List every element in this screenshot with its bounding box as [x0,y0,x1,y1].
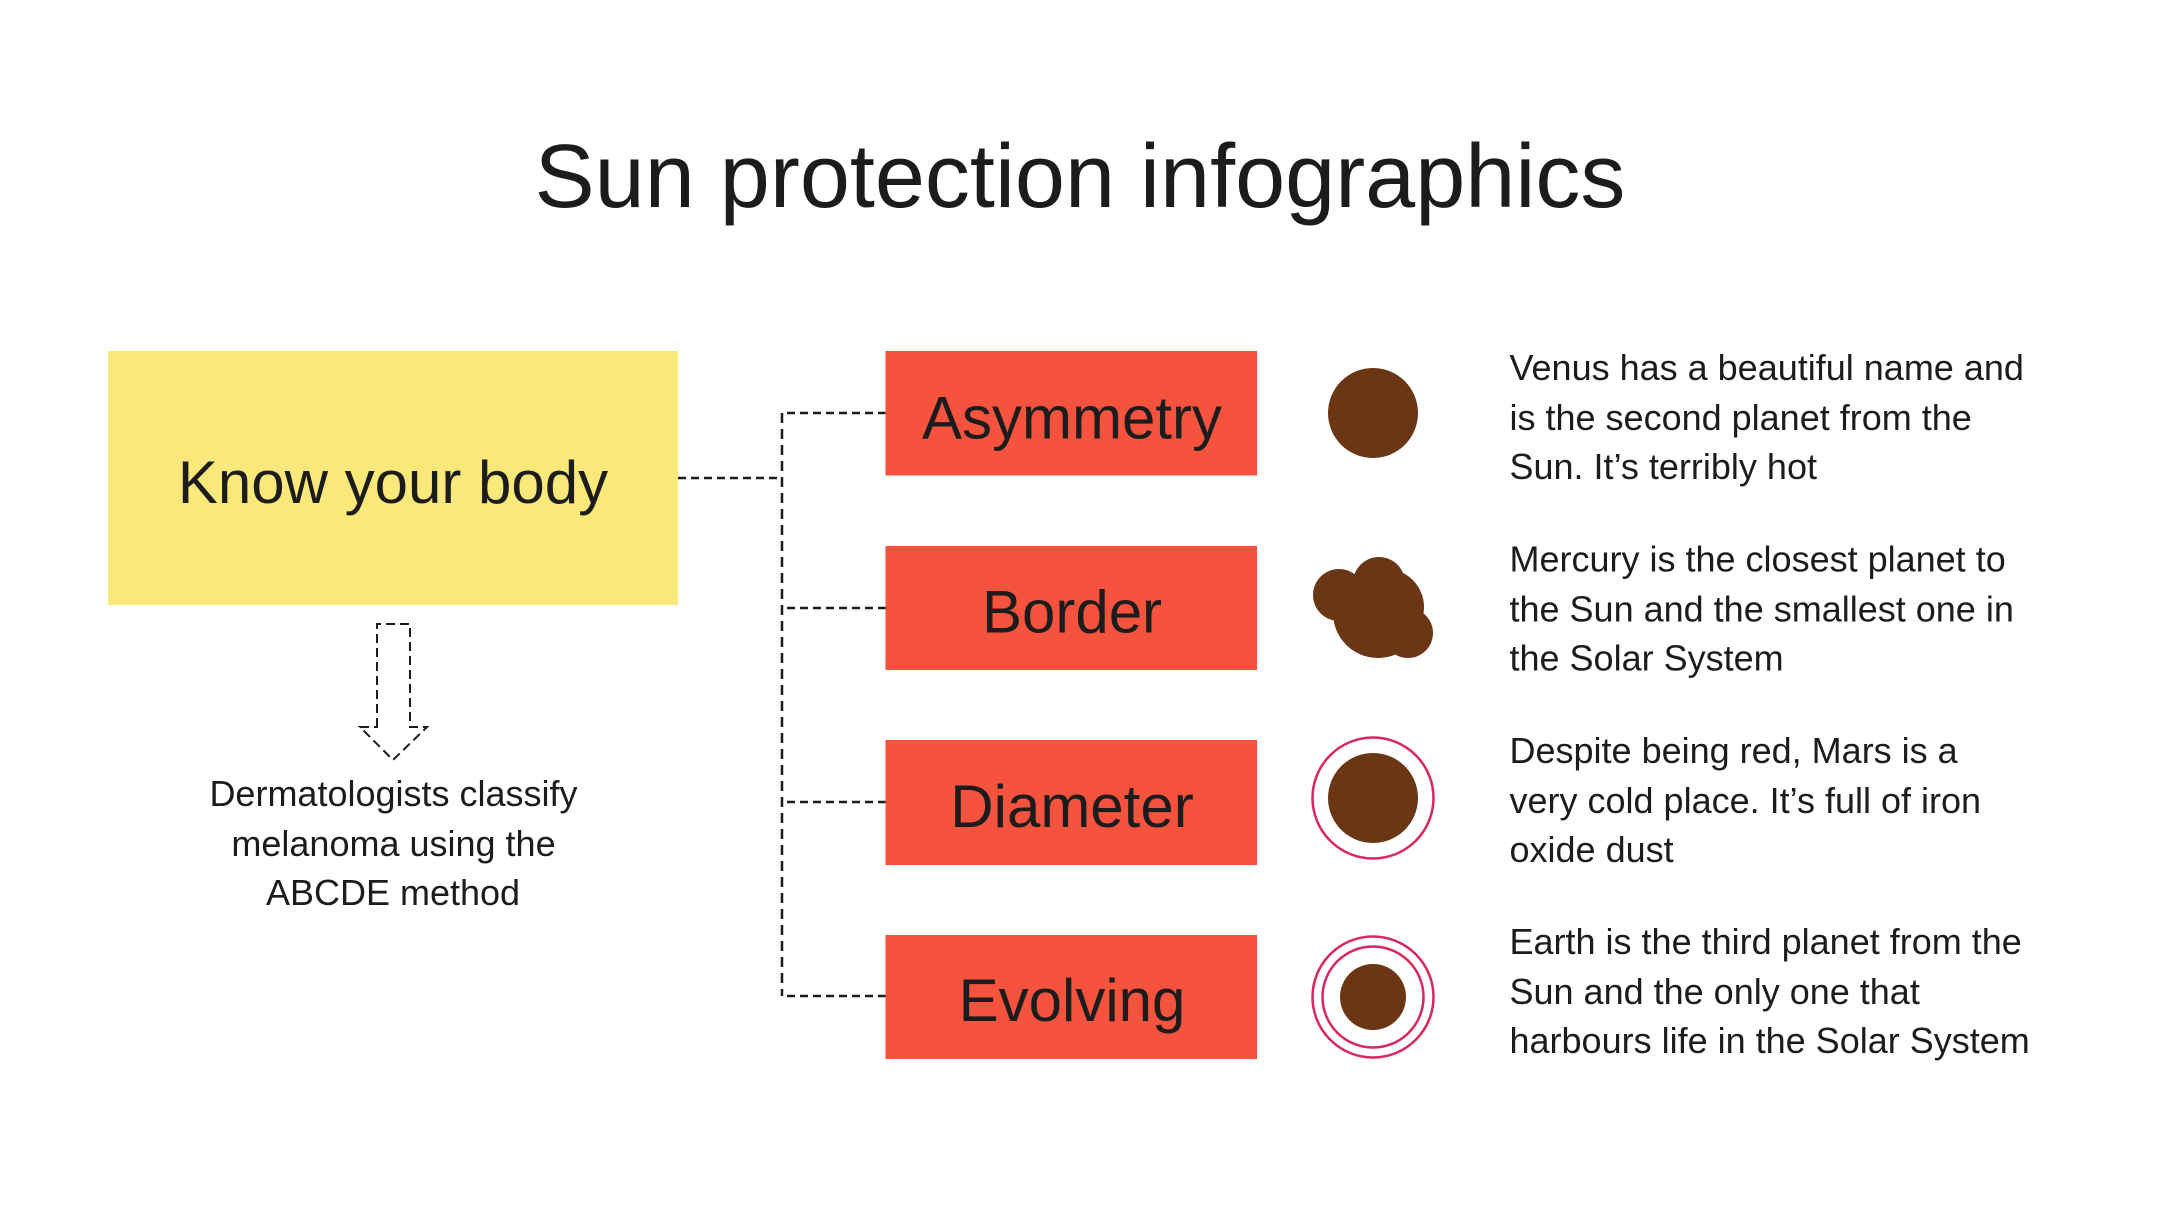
text: Earth: Sun and the only one that [1510,971,1920,1012]
label: Diameter: Diameter [950,773,1194,840]
text: Mars: Despite being red, Mars is a [1510,730,1959,771]
icon: mole with diameter ring [1312,738,1434,858]
text: Mercury: the Solar System [1510,638,1784,678]
label: Border [886,546,1257,670]
title: Sun protection infographics [535,127,1625,227]
text: ABCDE method note: melanoma using the [231,823,556,864]
text: ABCDE method note: Dermatologists classify [209,773,578,814]
label: Evolving [886,935,1257,1059]
text: Mars: very cold place. It’s full of iron [1510,780,1981,821]
label: Asymmetry [886,351,1257,476]
text: Venus: is the second planet from the [1510,397,1972,438]
text: Venus: Venus has a beautiful name and [1510,347,2024,388]
label: Evolving: Evolving [959,967,1185,1034]
text: Mercury: the Sun and the smallest one in [1510,588,2014,630]
text: Venus: Sun. It’s terribly hot [1510,446,1817,487]
icon: round mole [1328,368,1418,458]
text: ABCDE method note: ABCDE method [266,872,520,913]
arrow: dashed down arrow [360,624,427,760]
label: Border: Border [982,578,1162,646]
icon: irregular border mole [1313,557,1433,658]
text: ABCDE method note [209,773,578,913]
icon: mole with evolving rings [1312,936,1434,1058]
text: Mars: oxide dust [1510,829,1674,870]
connector: tree from main box to labels [678,413,886,996]
text: Earth: harbours life in the Solar System [1510,1020,2030,1061]
text: Earth: Earth is the third planet from the [1510,921,2022,962]
label: Asymmetry: Asymmetry [922,384,1222,452]
label: Diameter [886,740,1257,865]
panel: know your body: Know your body [178,449,608,516]
panel: know your body [108,351,678,605]
text: Mercury: Mercury is the closest planet to [1510,538,2006,580]
